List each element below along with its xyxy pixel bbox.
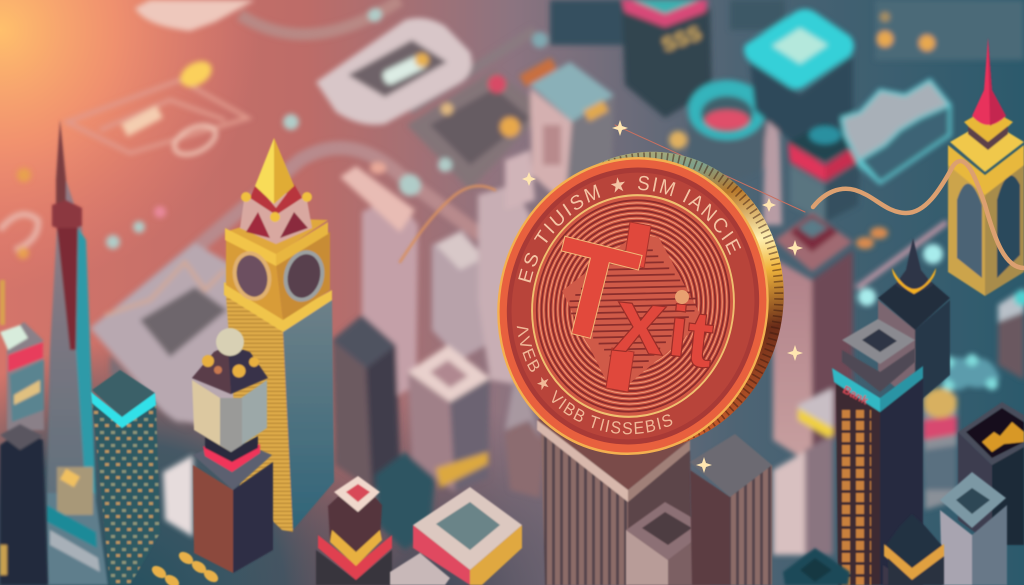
coin face: ΛVEB ★ VIBB TIISSEBIS: [516, 326, 672, 434]
small lights: [106, 8, 452, 249]
building: yellow clock tower: [224, 138, 334, 532]
small teal dark block: [375, 452, 435, 550]
pink road line: [857, 222, 947, 288]
building: thin spire center right: [763, 88, 782, 225]
coin emblem Txit: i: [664, 291, 693, 373]
building: dome tower: [192, 328, 273, 573]
pale block with yellow strip: [773, 388, 833, 555]
platform: top left pill: [135, 0, 255, 31]
coin emblem Txit: x: [610, 268, 671, 375]
mauve towers center: [362, 195, 418, 400]
tower body right face: [283, 298, 334, 530]
coin rim: [477, 122, 815, 480]
building: dark lit tower: [832, 319, 923, 585]
coin face: [497, 157, 769, 455]
chart line on platform: [105, 262, 225, 315]
coin emblem Txit: [534, 208, 718, 392]
small pale lower-left block: [163, 455, 193, 537]
coin emblem Txit: t: [682, 293, 718, 385]
coin engraved rings: [517, 182, 749, 430]
building: red band block: [788, 122, 860, 222]
building: far right black roof: [958, 402, 1024, 545]
glowing orb on board: [176, 56, 216, 92]
building: cyan ring: [688, 80, 766, 180]
building: pale grey tower: [530, 62, 614, 205]
drum with pink band: [923, 388, 957, 510]
coin rim text: ES TIUISM ★ SIM IANCIE: [518, 176, 742, 283]
teal cross blob: [940, 357, 1000, 390]
building: spire block with gold ring: [878, 238, 950, 405]
building: dark lit tower: Bank: [841, 384, 871, 408]
tower arches: [957, 184, 982, 278]
coin: [497, 152, 784, 455]
building: right yellow spire tower: [948, 38, 1024, 296]
cyan glow dots: [858, 288, 876, 306]
tower tiers: [948, 145, 1024, 195]
building: teal roof speckled tower: [91, 370, 160, 585]
sparkles: [522, 120, 803, 473]
tower red band: [250, 184, 302, 215]
tower pink roof tier: [240, 190, 312, 244]
far right mauve block: [998, 295, 1024, 380]
building: small front block: [626, 502, 710, 585]
pink top tower: [408, 345, 490, 492]
gold balls: [241, 192, 312, 222]
building: left edge tower: [0, 280, 48, 585]
outlined board: [67, 80, 248, 160]
building: lower red-gold block: [316, 476, 392, 585]
tower lower trim: [224, 282, 332, 332]
spire red tip: [972, 38, 1006, 125]
building: low teal court: [390, 487, 522, 585]
building: dark with pink roof: SSS: [659, 22, 704, 57]
road arcs: [100, 0, 535, 330]
building: right of coin bottom: [690, 434, 772, 585]
orange ovals on ground: [856, 237, 874, 249]
lower center blur block: [505, 420, 545, 498]
building: thin dark spire left: [47, 120, 108, 585]
tower body left face: [226, 295, 293, 532]
gold oval road lights: [150, 549, 220, 585]
plate: mid right: [407, 32, 557, 190]
graph line: orange curve across city: [400, 125, 1024, 268]
building: lower dark spire: [883, 514, 944, 585]
far dark top right blocks: [550, 0, 625, 45]
question-like road symbol far left: [0, 214, 38, 250]
tower clock head: [226, 235, 283, 320]
right mauve tower: [773, 213, 853, 465]
building: teal bottom block: [783, 548, 850, 585]
coin emblem Txit: T: [534, 208, 651, 374]
clock faces: [228, 247, 276, 305]
tower gold spire: [255, 138, 294, 204]
building: teal rounded top: [744, 9, 854, 160]
platform: center pill: [316, 18, 472, 125]
coin circuit diamond: [546, 220, 719, 398]
building: dark with pink roof: [622, 0, 712, 118]
building: large bottom center tower: [537, 398, 692, 585]
building: lower right grey block: [940, 472, 1007, 585]
dark mid tower: [332, 315, 400, 490]
building: wave chart sign: [842, 80, 950, 183]
platform: grey square: [90, 243, 245, 430]
